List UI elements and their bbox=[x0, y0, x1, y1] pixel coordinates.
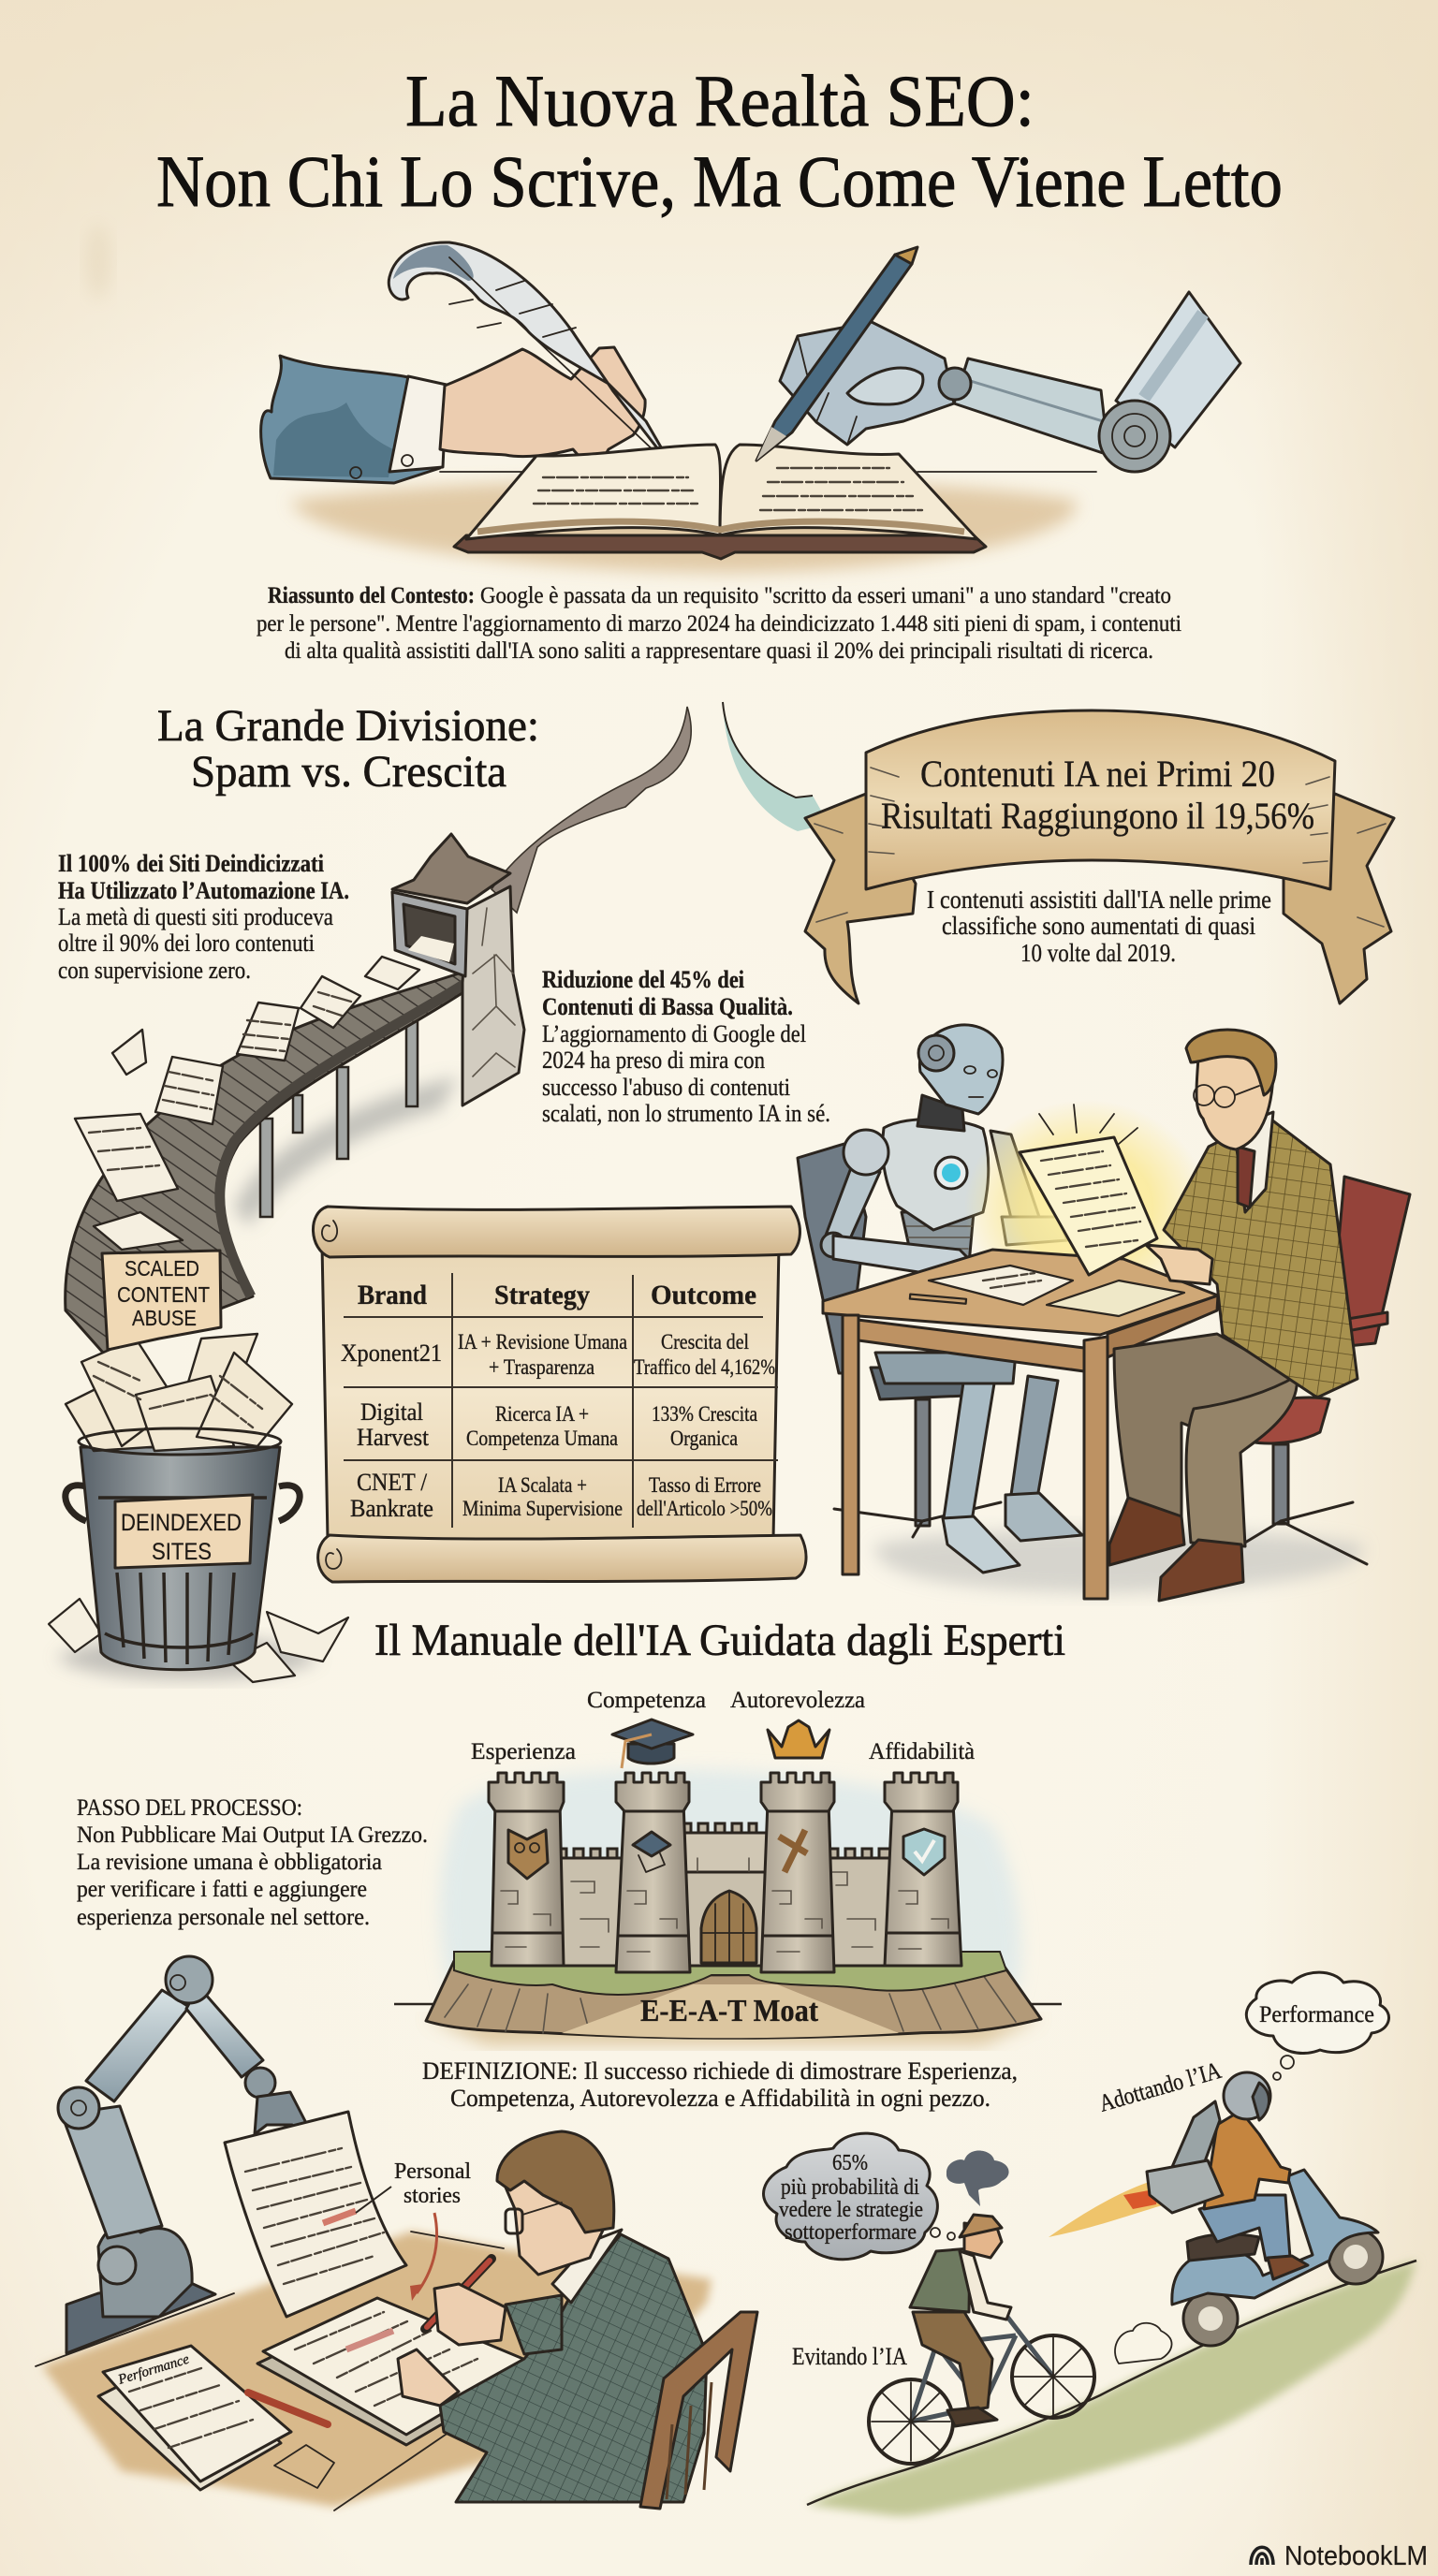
row: CNET Bankrate bbox=[350, 1469, 772, 1522]
human hand bbox=[440, 347, 645, 465]
door bbox=[701, 1891, 756, 1963]
man shoes bbox=[1109, 1498, 1243, 1601]
robot neck bbox=[917, 1095, 964, 1131]
table header bbox=[358, 1280, 756, 1310]
banner: AI content in top 20: Contenuti IA nei Primi 20 bbox=[920, 753, 1275, 795]
process step note: Non Pubblicare Mai Output IA Grezzo. bbox=[77, 1822, 428, 1848]
cliff bbox=[426, 1960, 1041, 2045]
table apron and legs bbox=[843, 1295, 1218, 1599]
row: Xponent21: Xponent21 bbox=[341, 1339, 442, 1367]
label: evitando l'IA: Evitando l’IA bbox=[792, 2343, 907, 2370]
robot chair bbox=[798, 1143, 1001, 1537]
row: Digital Harvest: Competenza Umana bbox=[466, 1427, 618, 1450]
desk bbox=[42, 2232, 712, 2507]
definition note bbox=[422, 2057, 1018, 2112]
printed page held by robot bbox=[225, 2112, 406, 2317]
label: adottando l'IA: Adottando l’IA bbox=[1096, 2056, 1225, 2117]
arrow: personal stories bbox=[356, 2187, 437, 2301]
sticky note bbox=[274, 2445, 334, 2488]
robot elbow joint bbox=[1099, 401, 1170, 472]
robot head bbox=[918, 1025, 1003, 1114]
banner caption: classifiche sono aumentati di quasi bbox=[942, 912, 1255, 940]
scroll body bbox=[322, 1245, 779, 1540]
sand path bbox=[562, 1984, 899, 2038]
context summary: Riassunto del Contesto: bbox=[268, 583, 475, 608]
man trousers bbox=[1114, 1334, 1297, 1546]
floor wash bbox=[874, 1529, 1363, 1593]
robot arm and human editor illustration bbox=[36, 1956, 757, 2510]
glowing document bbox=[1020, 1105, 1157, 1275]
label: scaled content abuse: SCALED bbox=[125, 1256, 199, 1281]
wall stonework bbox=[571, 1858, 875, 1947]
label: scaled content abuse bbox=[102, 1251, 221, 1350]
heading: La Grande Divisione: La Grande Divisione: bbox=[157, 701, 539, 751]
personal stories label bbox=[394, 2159, 471, 2208]
robot torso bbox=[883, 1120, 989, 1264]
process step note: esperienza personale nel settore. bbox=[77, 1905, 370, 1930]
label: scaled content abuse: ABUSE bbox=[132, 1306, 197, 1330]
table wash bbox=[290, 479, 1077, 573]
thought bubble: performance bbox=[1246, 1972, 1389, 2080]
floor shadow bbox=[56, 1636, 318, 1679]
row: Digital Harvest: Ricerca IA + bbox=[495, 1402, 589, 1426]
man head bbox=[1186, 1030, 1276, 1149]
feather quill bbox=[389, 242, 674, 470]
table header: Brand bbox=[358, 1280, 427, 1310]
heading: La Grande Divisione bbox=[157, 701, 539, 797]
label: deindexed sites: SITES bbox=[152, 1539, 212, 1565]
paper pile bbox=[66, 1334, 292, 1451]
robot arm base bbox=[66, 2225, 215, 2353]
context summary: Google è passata da un requisito "scritto da esseri umani" a uno standard "creato bbox=[480, 583, 1171, 608]
storm cloud bbox=[946, 2150, 1009, 2206]
conveyor shadow bbox=[234, 1076, 459, 1226]
robot legs bbox=[875, 1353, 1082, 1573]
banner: AI content in top 20: Risultati Raggiungono il 19,56% bbox=[881, 795, 1314, 837]
row: Xponent21 bbox=[341, 1330, 775, 1379]
row: CNET Bankrate: Minima Supervisione bbox=[462, 1497, 623, 1520]
stat: 100% deindexed: con supervisione zero. bbox=[58, 957, 251, 984]
banner caption bbox=[927, 886, 1271, 967]
stat: 100% deindexed: Ha Utilizzato l’Automazione IA. bbox=[58, 877, 349, 904]
table header: Outcome bbox=[651, 1280, 756, 1310]
stat: 45% reduction: 2024 ha preso di mira con bbox=[542, 1046, 765, 1074]
banner: AI content in top 20 bbox=[805, 710, 1394, 1003]
robot arm segments bbox=[58, 1956, 306, 2238]
robot and expert at a desk bbox=[798, 1025, 1410, 1601]
title bbox=[156, 60, 1283, 222]
banner main ribbon bbox=[866, 710, 1335, 889]
emblem: owl bbox=[508, 1830, 548, 1879]
stat: 45% reduction: successo l'abuso di contenuti bbox=[542, 1074, 790, 1101]
red chair bbox=[1226, 1177, 1410, 1564]
scooter bbox=[1172, 2170, 1383, 2346]
row: CNET Bankrate: IA Scalata + bbox=[498, 1473, 587, 1497]
can rim bbox=[79, 1428, 281, 1455]
man jacket bbox=[1164, 1112, 1357, 1398]
growth hill illustration bbox=[764, 1972, 1416, 2516]
bicycle bbox=[869, 2317, 1094, 2464]
robot forearm bbox=[954, 359, 1108, 455]
desk glow bbox=[964, 1100, 1208, 1315]
papers on desk bbox=[910, 1266, 1184, 1316]
row: Digital Harvest: 133% Crescita bbox=[652, 1402, 757, 1426]
row: Digital Harvest: Organica bbox=[670, 1427, 738, 1450]
man hands and pen bbox=[398, 2259, 506, 2406]
stat: 100% deindexed: La metà di questi siti produceva bbox=[58, 903, 333, 930]
table top bbox=[823, 1250, 1218, 1335]
arrow: teal to growth bbox=[723, 702, 829, 831]
dust puff bbox=[1115, 2323, 1172, 2364]
trash can bbox=[49, 1334, 348, 1682]
wooden chair bbox=[640, 2312, 757, 2509]
E-E-A-T pillar labels: Affidabilità bbox=[869, 1739, 975, 1764]
comparison table scroll bbox=[313, 1207, 806, 1582]
row: Xponent21: Crescita del bbox=[661, 1330, 749, 1354]
label: deindexed sites: DEINDEXED bbox=[121, 1510, 242, 1536]
title: La Nuova Realtà SEO: bbox=[405, 60, 1034, 141]
man head bbox=[497, 2131, 614, 2275]
process step note bbox=[77, 1795, 428, 1930]
title: Non Chi Lo Scrive, Ma Come Viene Letto bbox=[156, 140, 1283, 222]
thought bubble: 65%: sottoperformare bbox=[785, 2220, 917, 2245]
row: Xponent21: Traffico del 4,162% bbox=[634, 1355, 775, 1379]
context summary bbox=[257, 583, 1181, 664]
stat: 45% reduction: Contenuti di Bassa Qualità. bbox=[542, 993, 793, 1020]
towers bbox=[489, 1773, 961, 1972]
chute tower bbox=[392, 834, 524, 1105]
scooter rider bbox=[1147, 2072, 1308, 2279]
pen bbox=[756, 247, 917, 461]
cyclist bbox=[910, 2215, 1011, 2426]
process step note: La revisione umana è obbligatoria bbox=[77, 1850, 382, 1875]
row: Digital Harvest bbox=[357, 1398, 757, 1451]
process step note: PASSO DEL PROCESSO: bbox=[77, 1795, 302, 1821]
scattered papers bbox=[49, 1599, 348, 1682]
thought bubble: 65% bbox=[764, 2133, 955, 2260]
context summary: per le persone". Mentre l'aggiornamento di marzo 2024 ha deindicizzato 1.448 siti pieni di spam, i contenuti bbox=[257, 611, 1181, 637]
stat: 100% deindexed: oltre il 90% dei loro contenuti bbox=[58, 929, 315, 957]
man with tweed jacket bbox=[440, 2230, 707, 2502]
personal stories label: Personal bbox=[394, 2159, 471, 2184]
banner caption: 10 volte dal 2019. bbox=[1020, 939, 1176, 967]
man hand bbox=[1146, 1245, 1212, 1284]
E-E-A-T pillar labels bbox=[471, 1688, 975, 1764]
top roll bbox=[313, 1207, 800, 1257]
banner caption: I contenuti assistiti dall'IA nelle prime bbox=[927, 886, 1271, 914]
hill bbox=[807, 2261, 1416, 2516]
bottom roll bbox=[318, 1535, 806, 1582]
emblem: shield bbox=[903, 1829, 945, 1875]
context summary: di alta qualità assistiti dall'IA sono saliti a rappresentare quasi il 20% dei principali risultati di ricerca. bbox=[285, 638, 1153, 664]
water bbox=[394, 2003, 1062, 2005]
thought bubble: 65%: più probabilità di bbox=[781, 2175, 919, 2200]
paper stack bbox=[98, 2346, 291, 2490]
stat: 100% deindexed: Il 100% dei Siti Deindicizzati bbox=[58, 850, 324, 877]
row: CNET Bankrate: CNET / bbox=[357, 1469, 428, 1496]
thought bubble: 65%: 65% bbox=[832, 2151, 868, 2175]
definition note: DEFINIZIONE: Il successo richiede di dimostrare Esperienza, bbox=[422, 2057, 1018, 2085]
grid lines bbox=[344, 1273, 778, 1528]
sky wash bbox=[440, 1770, 1021, 1994]
icon: graduation cap bbox=[612, 1720, 693, 1768]
robot hand bbox=[780, 322, 971, 445]
emblem: hammer bbox=[779, 1830, 807, 1872]
conveyor belt bbox=[66, 972, 466, 1353]
thought bubble: 65%: vedere le strategie bbox=[779, 2198, 923, 2222]
moat label: E-E-A-T Moat bbox=[640, 1994, 819, 2028]
row: CNET Bankrate: dell'Articolo >50% bbox=[637, 1497, 772, 1520]
conveyor legs bbox=[260, 1020, 418, 1217]
stat: 45% reduction bbox=[542, 966, 830, 1127]
grass bbox=[454, 1952, 1006, 1995]
heading: La Grande Divisione: Spam vs. Crescita bbox=[191, 747, 506, 797]
row: CNET Bankrate: Tasso di Errore bbox=[649, 1473, 761, 1497]
can body bbox=[81, 1447, 280, 1670]
stat: 45% reduction: L’aggiornamento di Google del bbox=[542, 1020, 806, 1047]
stat: 45% reduction: scalati, non lo strumento IA in sé. bbox=[542, 1100, 830, 1127]
open book bbox=[454, 445, 986, 559]
emblem: mortarboard bbox=[633, 1832, 670, 1872]
banner hatching bbox=[814, 768, 1386, 927]
icon: crown bbox=[768, 1720, 829, 1758]
curtain walls bbox=[555, 1823, 894, 1966]
row: Xponent21: IA + Revisione Umana bbox=[458, 1330, 627, 1354]
table header: Strategy bbox=[494, 1280, 590, 1310]
label: deindexed sites bbox=[115, 1495, 253, 1568]
stat: 45% reduction: Riduzione del 45% dei bbox=[542, 966, 744, 993]
flame bbox=[1049, 2179, 1166, 2237]
can handles bbox=[66, 1486, 300, 1521]
stat: 100% deindexed bbox=[58, 850, 349, 984]
E-E-A-T pillar labels: Esperienza bbox=[471, 1739, 576, 1764]
heading: Il Manuale dell'IA Guidata dagli Esperti: Il Manuale dell'IA Guidata dagli Esperti bbox=[374, 1616, 1065, 1665]
robot upper arm bbox=[1116, 292, 1240, 447]
hero illustration: human hand and robot arm writing in a book bbox=[261, 242, 1240, 573]
definition note: Competenza, Autorevolezza e Affidabilità in ogni pezzo. bbox=[450, 2085, 990, 2112]
E-E-A-T pillar labels: Autorevolezza bbox=[730, 1688, 865, 1713]
robot arms bbox=[821, 1130, 1067, 1278]
human sleeve and cuff bbox=[261, 356, 449, 483]
label: scaled content abuse: CONTENT bbox=[117, 1282, 210, 1307]
tower stonework bbox=[501, 1891, 948, 1952]
row: CNET Bankrate: Bankrate bbox=[350, 1495, 433, 1522]
NotebookLM logo: NotebookLM bbox=[1284, 2541, 1428, 2571]
conveyor belt illustration bbox=[66, 834, 524, 1353]
row: Xponent21: + Trasparenza bbox=[489, 1355, 594, 1379]
banner left tail bbox=[805, 794, 916, 1003]
row: Digital Harvest: Digital bbox=[360, 1398, 423, 1426]
process step note: per verificare i fatti e aggiungere bbox=[77, 1877, 367, 1902]
castle: E-E-A-T moat bbox=[394, 1720, 1062, 2045]
paper stack: Performance bbox=[116, 2352, 191, 2388]
E-E-A-T pillar labels: Competenza bbox=[587, 1688, 706, 1713]
personal stories label: stories bbox=[404, 2184, 461, 2208]
arrow: grey to spam bbox=[492, 707, 691, 913]
notebook bbox=[257, 2298, 530, 2445]
conveyor side rail bbox=[220, 983, 466, 1296]
red pencil bbox=[248, 2393, 328, 2424]
banner right tail bbox=[1284, 794, 1394, 1003]
thought bubble: performance: Performance bbox=[1259, 2002, 1374, 2027]
papers on the belt bbox=[75, 957, 419, 1250]
row: Digital Harvest: Harvest bbox=[357, 1424, 430, 1451]
